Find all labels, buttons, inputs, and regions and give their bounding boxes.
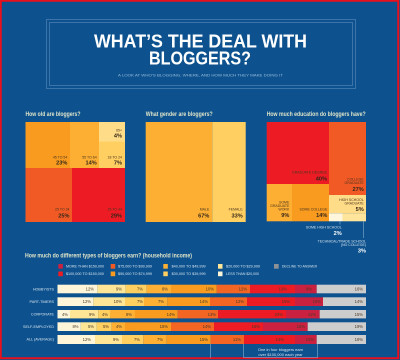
treemap: education: 27%	[352, 187, 364, 193]
heading: gender: What gender are bloggers?	[146, 111, 213, 118]
treemap: education: GRADUATE	[270, 204, 290, 208]
treemap: education	[267, 122, 366, 221]
legend: LESS THAN $20,000	[226, 272, 259, 276]
bar row: hobbyists: 9%	[306, 287, 312, 292]
callout: technical school: (NO COLLEGE)	[341, 243, 366, 247]
bar row: corporate: 15%	[355, 312, 363, 317]
legend: $75,000 TO $99,999	[118, 265, 152, 269]
treemap: education: 9%	[281, 213, 289, 219]
bar row: part-timers: 10%	[114, 299, 122, 304]
treemap: education: COLLEGE	[347, 178, 364, 182]
callout: some high school	[306, 221, 342, 237]
heading: income: How much do different types of bloggers earn? (household income)	[25, 252, 192, 259]
bar row: self-employed: 14%	[203, 324, 211, 329]
bar row: part-timers: 7%	[158, 299, 164, 304]
treemap: education: GRADUATE	[345, 202, 364, 206]
callout: technical school: 3%	[358, 249, 366, 255]
bar row: all (average): 9%	[113, 337, 119, 342]
bar row: corporate	[31, 310, 366, 318]
title block	[46, 20, 356, 88]
callout: technical school	[318, 221, 366, 255]
bar row: all (average): 14%	[276, 337, 284, 342]
bar row: self-employed: 5%	[103, 324, 109, 329]
bar row: corporate: 13%	[208, 312, 216, 317]
bar row: part-timers: 12%	[236, 299, 244, 304]
bar row: part-timers: 10%	[313, 299, 321, 304]
bar row: hobbyists: HOBBYISTS	[33, 287, 55, 291]
bar row: hobbyists: 10%	[206, 287, 214, 292]
bar row: corporate: 11%	[308, 312, 316, 317]
legend: MORE THAN $150,000	[66, 265, 104, 269]
legend: $30,000 TO $39,999	[172, 272, 206, 276]
bar row: self-employed: 5%	[88, 324, 94, 329]
panel: education	[267, 111, 366, 255]
treemap: age: 29%	[111, 214, 122, 220]
bar row: part-timers: 14%	[355, 299, 363, 304]
bar row: hobbyists: 8%	[162, 287, 168, 292]
bar row: all (average): 15%	[200, 337, 208, 342]
bar row: all (average): 16%	[355, 337, 363, 342]
bar row: hobbyists: 13%	[279, 287, 287, 292]
bar row: hobbyists: 7%	[137, 287, 143, 292]
callout: one in four: One in four bloggers earn	[258, 347, 303, 352]
callout: some high school: 2%	[334, 231, 342, 237]
treemap: gender: MALE	[200, 208, 210, 212]
treemap: age: 23%	[56, 160, 67, 166]
bar row: part-timers: PART-TIMERS	[30, 300, 55, 304]
bar row: part-timers: 12%	[83, 299, 91, 304]
treemap: age: 25 TO 34	[55, 207, 70, 211]
treemap: age: 4%	[114, 134, 122, 140]
treemap: age	[26, 122, 125, 222]
treemap: education: GRADUATE	[345, 181, 364, 185]
bar row: corporate: CORPORATE	[31, 313, 55, 317]
callout: technical school: TECHNICAL/TRADE SCHOOL	[318, 239, 366, 243]
treemap: education: 40%	[316, 176, 327, 182]
treemap: age: 7%	[114, 160, 122, 166]
legend: $100,000 TO $150,000	[66, 272, 104, 276]
bar row: self-employed: 15%	[297, 324, 305, 329]
bar row: self-employed: 15%	[160, 324, 168, 329]
bar row: all (average): 7%	[157, 337, 163, 342]
treemap: education: WORK	[278, 208, 290, 212]
legend: $50,000 TO $74,999	[118, 272, 152, 276]
heading: education: How much education do bloggers have?	[267, 111, 366, 118]
panel: gender	[146, 111, 246, 222]
bar row: corporate: 22%	[275, 312, 283, 317]
bar row: self-employed: 8%	[72, 324, 79, 329]
bar row: corporate: 8%	[126, 312, 132, 317]
subtitle: A LOOK AT WHO’S BLOGGING, WHERE, AND HOW MUCH THEY MAKE DOING IT	[118, 74, 284, 78]
treemap: age: 35 TO 44	[108, 207, 122, 211]
treemap: gender	[146, 122, 246, 222]
bar row: all (average): 10%	[306, 337, 314, 342]
bar row: all (average): ALL (AVERAGE)	[27, 338, 54, 342]
panel: age	[26, 111, 125, 222]
treemap: education: GRADUATE DEGREE	[292, 170, 328, 174]
title second line: BLOGGERS?	[149, 48, 251, 68]
bar row: hobbyists: 12%	[86, 287, 94, 292]
bar row: all (average)	[27, 335, 366, 344]
bar row: corporate: 9%	[89, 312, 95, 317]
treemap: education: 14%	[316, 213, 327, 219]
callout: some high school: SOME HIGH SCHOOL	[306, 226, 342, 230]
bar row: self-employed: SELF-EMPLOYED	[23, 325, 54, 329]
bar row: self-employed: 16%	[252, 324, 260, 329]
treemap: education: 5%	[356, 207, 364, 213]
bar row: part-timers: 14%	[200, 299, 208, 304]
treemap: age: 55 TO 64	[82, 155, 97, 159]
bar row: hobbyists	[33, 285, 366, 293]
treemap: age: 65+	[116, 128, 122, 132]
bar row: self-employed: 19%	[355, 324, 363, 329]
bar row: part-timers: 7%	[137, 299, 143, 304]
bar row: self-employed: 4%	[116, 324, 122, 329]
bar row: all (average): 11%	[233, 337, 241, 342]
panel: income	[23, 252, 366, 358]
heading: age: How old are bloggers?	[26, 111, 81, 118]
bar row: all (average): 12%	[83, 337, 91, 342]
treemap: age: 18 TO 24	[108, 155, 122, 159]
treemap: education: HIGH SCHOOL	[339, 198, 364, 202]
treemap: education: SOME COLLEGE	[299, 208, 328, 212]
bar row: hobbyists: 16%	[355, 287, 363, 292]
treemap: gender: 67%	[198, 214, 209, 220]
treemap: gender: 33%	[231, 214, 243, 220]
bar row: hobbyists: 12%	[239, 287, 247, 292]
bar row: corporate: 4%	[102, 312, 108, 317]
treemap: age: 45 TO 54	[53, 155, 67, 159]
bar row: hobbyists: 9%	[116, 287, 122, 292]
legend	[58, 264, 317, 276]
callout bracket line	[210, 344, 212, 358]
legend: $40,000 TO $49,999	[172, 265, 206, 269]
callout: one in four: over $100,000 each year	[258, 352, 303, 357]
bar row: self-employed	[23, 322, 366, 331]
bar row: all (average): 7%	[134, 337, 140, 342]
legend: $20,000 TO $29,999	[226, 265, 260, 269]
treemap: education: SOME	[279, 200, 290, 204]
bar row: part-timers: 15%	[282, 299, 290, 304]
title: WHAT’S THE DEAL WITH	[94, 30, 307, 52]
treemap: gender: FEMALE	[229, 208, 243, 212]
bar row: corporate: 4%	[62, 312, 68, 317]
treemap: age: 14%	[85, 160, 97, 166]
legend: DECLINE TO ANSWER	[282, 265, 317, 269]
bar row: part-timers	[30, 297, 366, 306]
bar row: corporate: 14%	[167, 312, 175, 317]
callout: one in four	[244, 344, 318, 358]
treemap: age: 25%	[58, 214, 70, 220]
